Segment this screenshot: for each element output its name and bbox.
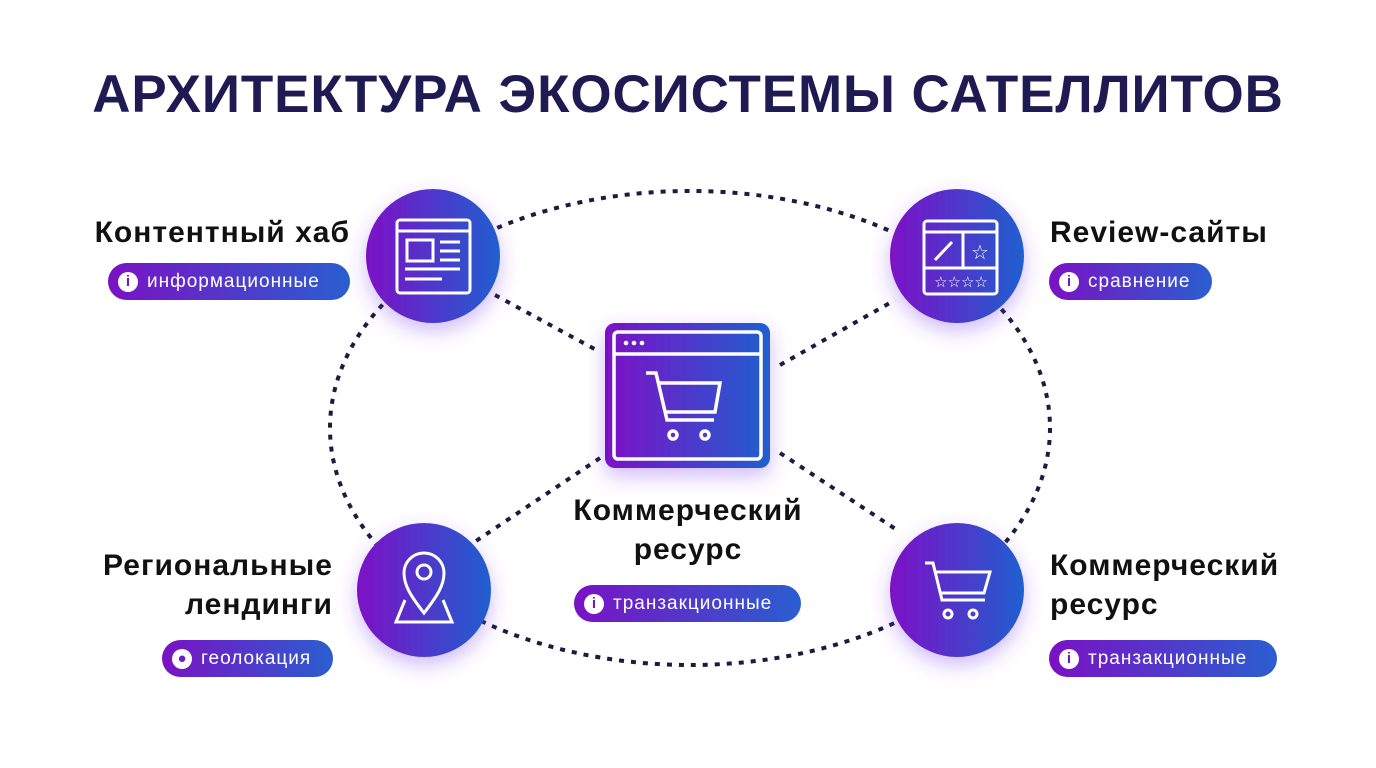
pill: транзакционные right: i [1067,650,1071,666]
pill: геолокация [162,640,333,677]
icon: central commercial [605,323,770,468]
label: commercial right: Коммерческий [1050,549,1279,582]
pill: транзакционные right [1049,640,1277,677]
icon: commercial right [890,523,1024,657]
pill: информационные: информационные [147,270,320,292]
pill: транзакционные center: транзакционные [613,592,772,614]
icon: review: ☆☆☆☆ [934,274,988,291]
label: central: Коммерческий [573,494,803,527]
dotted ellipse connectors [330,191,1050,665]
pill: транзакционные center: i [592,594,596,612]
label: regional [103,549,333,621]
pill: сравнение: сравнение [1088,270,1190,292]
label: central [573,494,803,566]
label: content hub: Контентный хаб [95,216,350,249]
label: review: Review-сайты [1050,216,1268,249]
label: commercial right [1050,549,1279,621]
pill: сравнение: i [1067,272,1071,290]
label: central: ресурс [634,533,742,566]
icon: content hub [366,189,500,323]
icon: regional [357,523,491,657]
label: regional: Региональные [103,549,333,582]
pill: геолокация: геолокация [201,648,311,668]
pill: сравнение [1049,263,1212,300]
label: regional: лендинги [185,588,333,621]
pill: транзакционные right: транзакционные [1088,648,1247,668]
pill: транзакционные center [574,585,801,622]
pill: геолокация: ● [177,650,187,666]
icon: review: ☆ [971,242,989,264]
pill: информационные: i [126,272,130,290]
icon: review [890,189,1024,323]
title: АРХИТЕКТУРА ЭКОСИСТЕМЫ САТЕЛЛИТОВ [92,65,1284,124]
label: commercial right: ресурс [1050,588,1159,621]
pill: информационные [108,263,350,300]
